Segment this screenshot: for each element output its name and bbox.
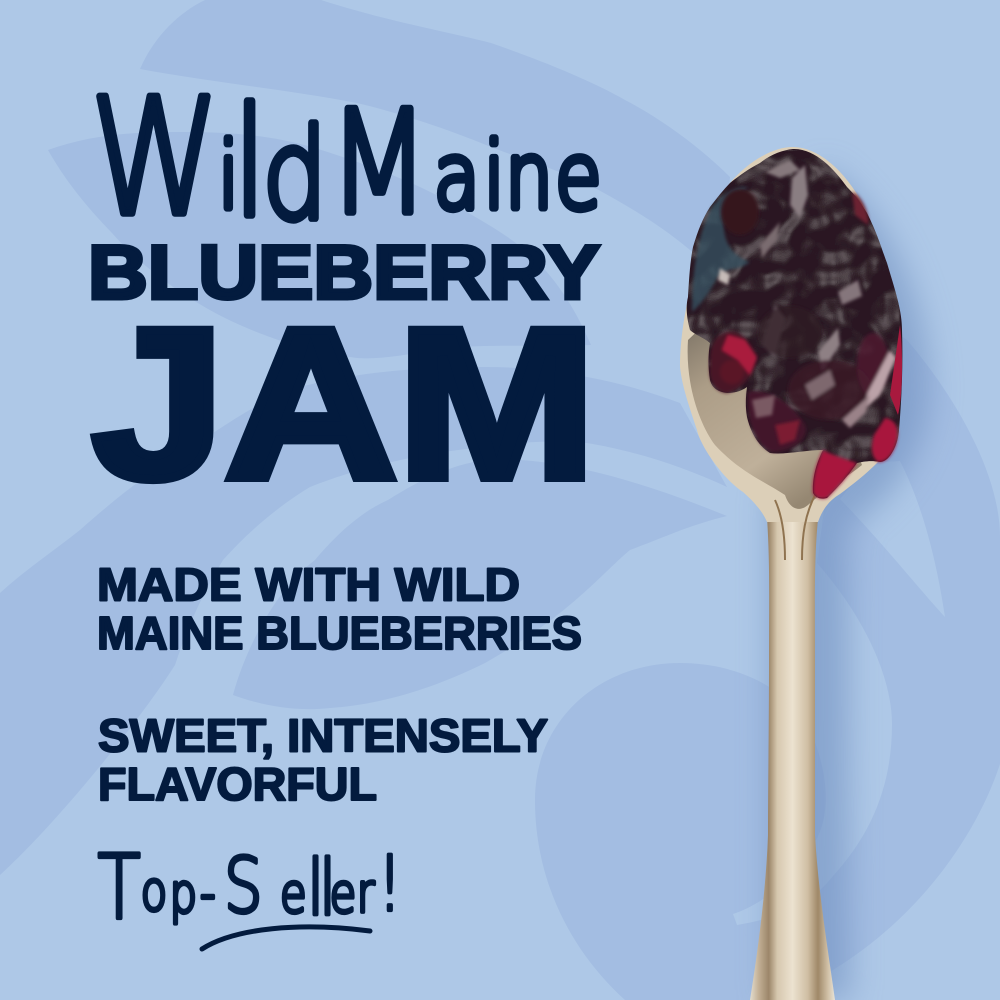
callout: Top-Seller handwritten: l <box>319 844 336 933</box>
text block: made with wild maine blueberries: MAINE BLUEBERRIES <box>97 607 582 659</box>
callout: Top-Seller handwritten: T <box>98 836 141 939</box>
callout: Top-Seller handwritten: o <box>141 860 167 923</box>
heading: JAM: JAM <box>92 284 596 524</box>
callout: Top-Seller handwritten: S <box>224 842 263 931</box>
jam: red drips <box>813 450 857 499</box>
title: Wild Maine script: l <box>233 77 267 251</box>
text block: sweet, intensely flavorful <box>98 710 548 810</box>
text block: sweet, intensely flavorful: SWEET, INTENSELY <box>98 710 548 762</box>
callout: Top-Seller handwritten: l <box>307 844 324 933</box>
spoon <box>680 147 902 1000</box>
spoon shadow <box>770 165 930 1000</box>
text block: made with wild maine blueberries: MADE WITH WILD <box>97 558 520 610</box>
title: Wild Maine script: d <box>262 102 327 248</box>
callout: Top-Seller handwritten: ! <box>378 840 402 929</box>
text block: sweet, intensely flavorful: FLAVORFUL <box>98 758 377 810</box>
jam: blue sheen <box>692 187 750 312</box>
callout: Top-Seller handwritten: r <box>357 862 375 925</box>
title: Wild Maine script: e <box>555 123 602 230</box>
text block: made with wild maine blueberries <box>97 558 582 659</box>
spoon bowl <box>680 147 902 522</box>
heading: BLUEBERRY: BLUEBERRY <box>88 230 600 316</box>
jam: main mass <box>687 149 902 499</box>
jam: dark berries and glints <box>718 160 896 428</box>
title: Wild Maine script: n <box>505 123 553 230</box>
jam on spoon <box>687 149 902 499</box>
title: Wild Maine script: W <box>90 64 220 251</box>
callout: Top-Seller handwritten <box>98 836 402 949</box>
title: Wild Maine script: a <box>434 123 480 230</box>
title: Wild Maine script: M <box>329 80 429 246</box>
title: Wild Maine script: i <box>484 123 505 230</box>
spoon neck grooves <box>775 495 815 560</box>
callout: Top-Seller handwritten: p <box>170 862 197 925</box>
spoon bowl interior <box>688 300 862 509</box>
callout: Top-Seller handwritten: e <box>330 862 356 925</box>
spoon handle <box>750 519 835 1000</box>
title: Wild Maine script: i <box>218 123 239 230</box>
jam: lower cluster <box>748 391 806 452</box>
jam: red berry left <box>710 331 757 393</box>
callout: Top-Seller handwritten: e <box>280 862 307 925</box>
background light crescent <box>840 461 945 617</box>
callout: Top-Seller handwritten: - <box>200 862 216 925</box>
